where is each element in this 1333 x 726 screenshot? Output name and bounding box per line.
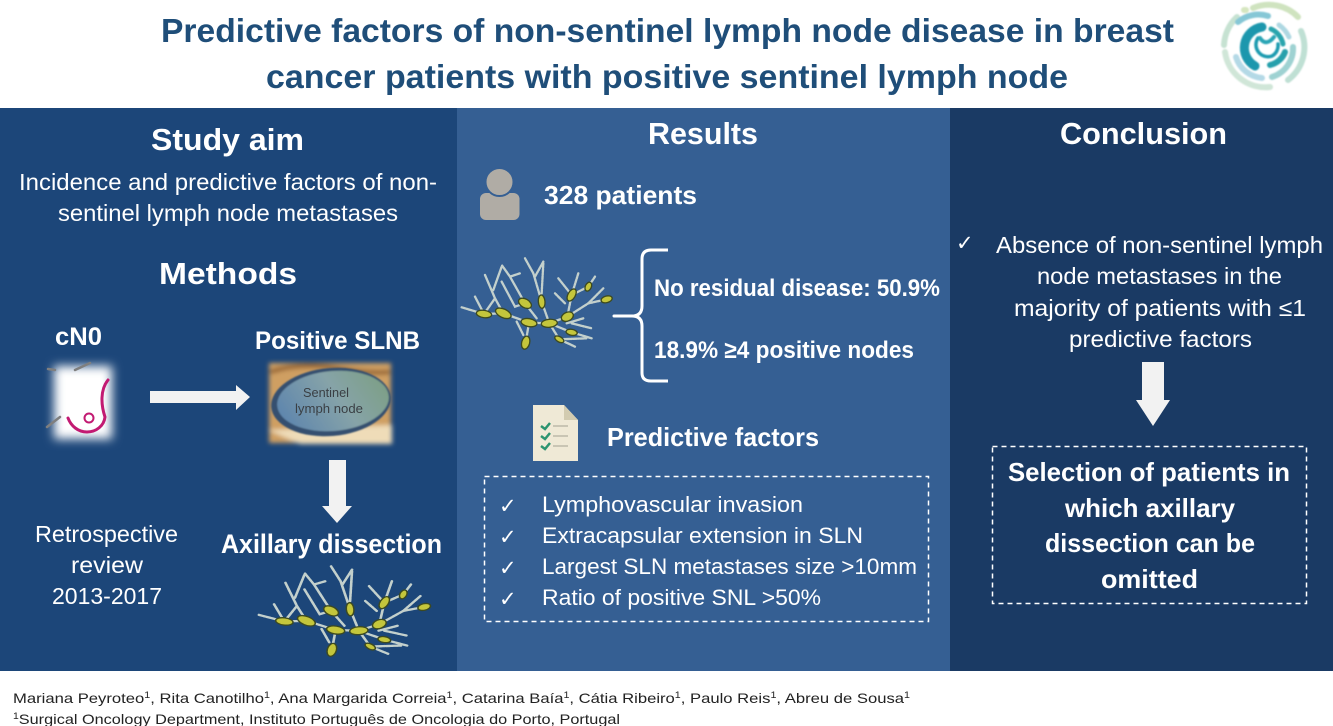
box: predictive factors list: ✓ — [499, 587, 517, 611]
footer: authors and affiliation: 1 — [144, 690, 150, 700]
panel: left study aim and methods — [0, 108, 457, 671]
heading: conclusion: Conclusion — [1060, 116, 1227, 151]
title — [161, 12, 1174, 95]
box: patient selection: Selection of patients in — [1008, 457, 1290, 487]
footer: authors and affiliation: , Cátia Ribeiro — [569, 690, 675, 706]
box: patient selection: dissection can be — [1045, 528, 1255, 558]
title: cancer patients with positive sentinel lymph node — [266, 58, 1068, 95]
image: sentinel lymph node — [268, 363, 394, 444]
box: patient selection: omitted — [1101, 564, 1198, 594]
panel: results — [457, 108, 950, 671]
heading: results: Results — [648, 116, 758, 151]
text: conclusion statement: ✓ — [956, 231, 974, 255]
text: study aim description — [19, 169, 437, 226]
footer: authors and affiliation: 1 — [770, 690, 776, 700]
icon: patient — [480, 168, 520, 220]
text: retrospective review: Retrospective — [35, 521, 178, 547]
footer: authors and affiliation: , Paulo Reis — [681, 690, 770, 706]
text: study aim description: sentinel lymph node metastases — [58, 200, 398, 226]
brace — [614, 250, 668, 381]
footer: authors and affiliation: , Ana Margarida Correia — [270, 690, 447, 706]
text: retrospective review — [35, 521, 178, 609]
image: lymphatic tree — [462, 258, 613, 350]
box: predictive factors list: ✓ — [499, 494, 517, 518]
footer: authors and affiliation: 1 — [675, 690, 681, 700]
box: predictive factors list: Largest SLN metastases size >10mm — [542, 554, 917, 579]
title: Predictive factors of non-sentinel lymph node disease in breast — [161, 12, 1174, 49]
panel: conclusion — [950, 108, 1333, 671]
icon: journal logo — [1224, 5, 1304, 87]
heading: predictive factors: Predictive factors — [607, 422, 819, 452]
text: study aim description: Incidence and predictive factors of non- — [19, 169, 437, 195]
image: sentinel lymph node: Sentinel — [303, 385, 349, 400]
text: retrospective review: 2013-2017 — [52, 583, 162, 609]
heading: methods: Methods — [159, 256, 297, 291]
box: patient selection — [992, 446, 1306, 604]
footer: authors and affiliation: , Rita Canotilho — [150, 690, 264, 706]
text: conclusion statement: Absence of non-sentinel lymph — [996, 232, 1323, 258]
image: lymphatic tree — [259, 566, 431, 657]
text: residual disease: No residual disease: 50.9% — [654, 275, 940, 302]
footer: authors and affiliation: , Abreu de Sousa — [776, 690, 904, 706]
box: predictive factors list: ✓ — [499, 556, 517, 580]
heading: study aim: Study aim — [151, 122, 304, 157]
footer: authors and affiliation: , Catarina Baía — [453, 690, 564, 706]
text: conclusion statement: node metastases in the — [1037, 263, 1282, 289]
box: predictive factors list: Lymphovascular invasion — [542, 492, 803, 517]
footer: authors and affiliation: 1 — [563, 690, 569, 700]
footer: authors and affiliation: 1 — [13, 711, 19, 721]
footer: authors and affiliation: Mariana Peyroteo — [13, 690, 124, 706]
label: axillary dissection: Axillary dissection — [221, 529, 442, 559]
text: positive nodes: 18.9% ≥4 positive nodes — [654, 337, 914, 364]
text: conclusion statement — [956, 231, 1323, 352]
box: predictive factors list — [484, 476, 928, 622]
image: sentinel lymph node: lymph node — [295, 401, 363, 416]
footer: authors and affiliation: 1 — [264, 690, 270, 700]
text: conclusion statement: predictive factors — [1069, 326, 1252, 352]
text: patient count: 328 patients — [544, 180, 697, 210]
box: patient selection: which axillary — [1064, 493, 1236, 523]
footer: authors and affiliation: 1 — [447, 690, 453, 700]
arrow: conclusion down — [1136, 362, 1170, 426]
box: predictive factors list: Extracapsular extension in SLN — [542, 523, 863, 548]
label: positive SLNB: Positive SLNB — [255, 327, 420, 355]
text: conclusion statement: majority of patients with ≤1 — [1014, 295, 1306, 321]
box: predictive factors list: ✓ — [499, 525, 517, 549]
arrow: positive SLNB to axillary dissection — [322, 460, 352, 523]
icon: checklist document — [533, 405, 578, 461]
footer: authors and affiliation: 1 — [904, 690, 910, 700]
box: predictive factors list: Ratio of positive SNL >50% — [542, 585, 821, 610]
label: cN0: cN0 — [55, 323, 102, 351]
text: retrospective review: review — [71, 552, 143, 578]
icon: breast — [47, 363, 112, 439]
arrow: cN0 to positive SLNB — [150, 385, 250, 410]
footer: authors and affiliation — [13, 690, 910, 726]
